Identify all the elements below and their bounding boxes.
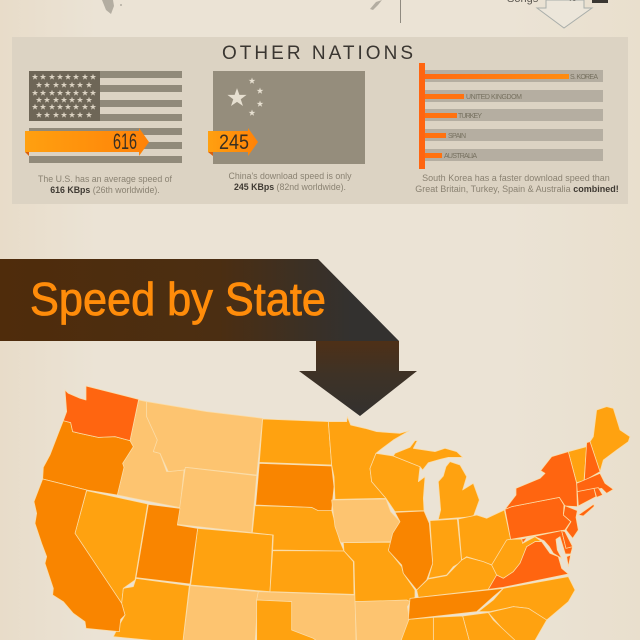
panel: other nations: 245 KBps (82nd worldwide). bbox=[234, 182, 346, 192]
China flag bbox=[213, 71, 365, 164]
US caption: The U.S. has an average speed of bbox=[38, 174, 173, 184]
panel: other nations: Great Britain, Turkey, Spain & Australia combined! bbox=[415, 184, 619, 194]
US flag bbox=[29, 71, 182, 163]
bar chart: download speeds: UNITED KINGDOM bbox=[466, 94, 522, 101]
arrow: down to map bbox=[299, 341, 417, 416]
heading: speed by state: Speed by State bbox=[30, 273, 326, 325]
bar chart: download speeds: S. KOREA bbox=[570, 74, 598, 81]
bar chart: download speeds: TURKEY bbox=[458, 113, 482, 120]
South Korea caption: South Korea has a faster download speed than bbox=[422, 173, 610, 183]
China speed arrow bbox=[208, 128, 258, 156]
US speed arrow: 616 bbox=[113, 129, 137, 154]
panel: other nations bbox=[12, 37, 628, 204]
top fragment: vertical divider bbox=[400, 0, 401, 23]
heading: other nations: OTHER NATIONS bbox=[222, 43, 413, 64]
banner: speed by state bbox=[0, 259, 399, 341]
China speed arrow: 245 bbox=[219, 131, 249, 154]
map: US states by speed bbox=[34, 386, 630, 640]
panel: other nations: 616 KBps (26th worldwide). bbox=[50, 185, 160, 195]
China caption: China's download speed is only bbox=[229, 171, 352, 181]
top fragment: cropped map shapes bbox=[102, 0, 382, 14]
top fragment: outline arrow with cropped label bbox=[507, 0, 608, 28]
bar chart: download speeds bbox=[419, 63, 603, 169]
US speed arrow bbox=[25, 128, 149, 156]
bar chart: download speeds: SPAIN bbox=[448, 133, 466, 140]
bar chart: download speeds: AUSTRALIA bbox=[444, 153, 477, 160]
